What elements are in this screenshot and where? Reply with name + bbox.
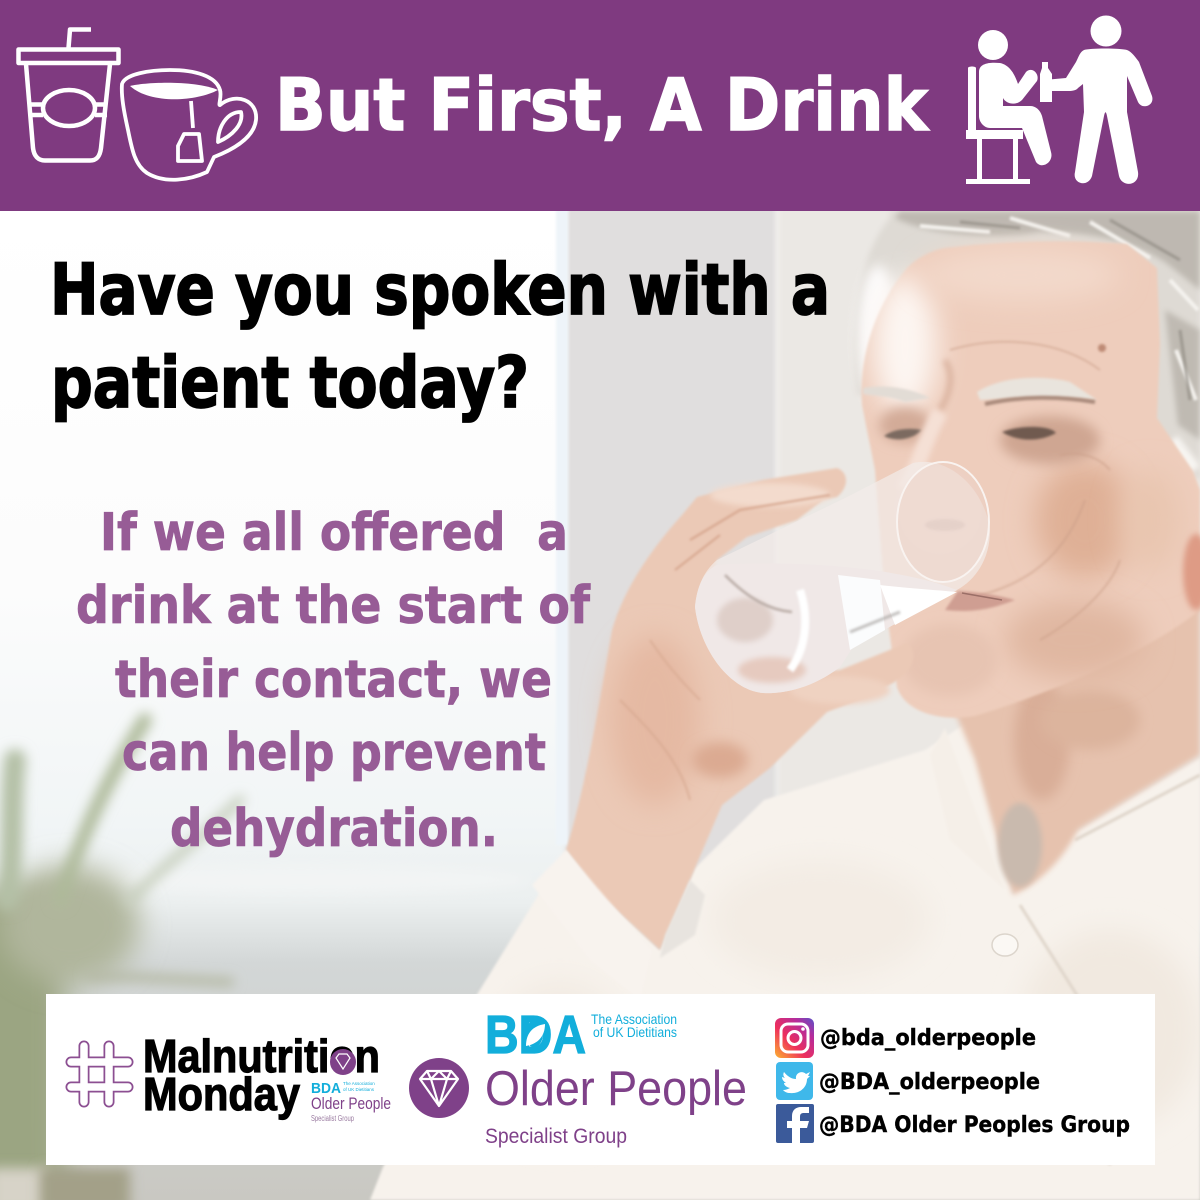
shirt button [992, 934, 1018, 956]
icon: diamond badge [409, 1058, 469, 1118]
standing person [1044, 48, 1152, 184]
logo: Malnutrition Monday: Malnutrition [143, 1030, 380, 1082]
man's hand holding glass [566, 468, 913, 950]
logo: BDA Older People Specialist Group: Older People [485, 1062, 747, 1116]
seated patient [979, 63, 1051, 165]
photo: elderly man drinking water [370, 211, 1200, 1200]
purple message text: drink at the start of [76, 576, 591, 636]
chair [966, 66, 1030, 184]
heading: Have you spoken with a [50, 249, 830, 331]
drinking glass with water [695, 462, 990, 693]
header band [0, 0, 1200, 211]
man's shirt [370, 722, 1200, 1200]
icon: leaf in the letter D [525, 1021, 545, 1047]
man's face [862, 241, 1200, 718]
logo: Malnutrition Monday: Specialist Group [311, 1114, 354, 1123]
icon: seated person and person offering a drink [966, 16, 1152, 184]
purple message text: their contact, we [115, 650, 552, 710]
logo: BDA Older People Specialist Group: Specialist Group [485, 1125, 627, 1148]
social: instagram: @bda_olderpeople [820, 1026, 1036, 1051]
man's neck [955, 600, 1200, 895]
logo: BDA Older People Specialist Group [409, 1005, 747, 1148]
logo: Malnutrition Monday: BDA [311, 1080, 341, 1097]
man's wrinkles [950, 342, 1120, 640]
heading: patient today? [51, 342, 529, 424]
logo: Malnutrition Monday [71, 1030, 391, 1123]
man's mouth [945, 591, 1015, 611]
purple message text [76, 503, 591, 859]
man's hair [854, 211, 1200, 480]
social: twitter: @BDA_olderpeople [819, 1070, 1040, 1095]
footer logo panel [46, 994, 1155, 1165]
logo: Malnutrition Monday: Older People [311, 1094, 391, 1113]
social: instagram [775, 1018, 1036, 1058]
logo: BDA Older People Specialist Group: of UK Dietitians [593, 1024, 677, 1040]
logo: Malnutrition Monday: The Association [343, 1081, 375, 1086]
purple message text: If we all offered a [100, 503, 568, 563]
man's nose behind glass [898, 466, 982, 554]
icon: tea mug with teabag [122, 70, 256, 180]
social: twitter [776, 1062, 1040, 1100]
purple message text: dehydration. [170, 799, 498, 859]
logo: BDA Older People Specialist Group: The Association [591, 1011, 677, 1027]
logo: Malnutrition Monday: of UK Dietitians [343, 1087, 375, 1092]
logo: BDA Older People Specialist Group: BDA [485, 1005, 586, 1065]
bottle [1040, 62, 1052, 102]
icon: outlined hash [71, 1046, 128, 1102]
social: facebook: @BDA Older Peoples Group [819, 1113, 1130, 1138]
logo: Malnutrition Monday: Monday [143, 1068, 300, 1120]
title: But First, A Drink [275, 63, 930, 147]
heading [50, 249, 830, 424]
social: facebook [776, 1104, 1130, 1143]
icon: takeaway cup with straw [18, 30, 118, 160]
purple message text: can help prevent [122, 723, 546, 783]
icon: diamond badge in wordmark [330, 1049, 356, 1075]
man's eyes and eyebrows [863, 360, 1100, 490]
blurred plant [0, 720, 240, 1200]
shirt cuff [532, 850, 652, 1000]
